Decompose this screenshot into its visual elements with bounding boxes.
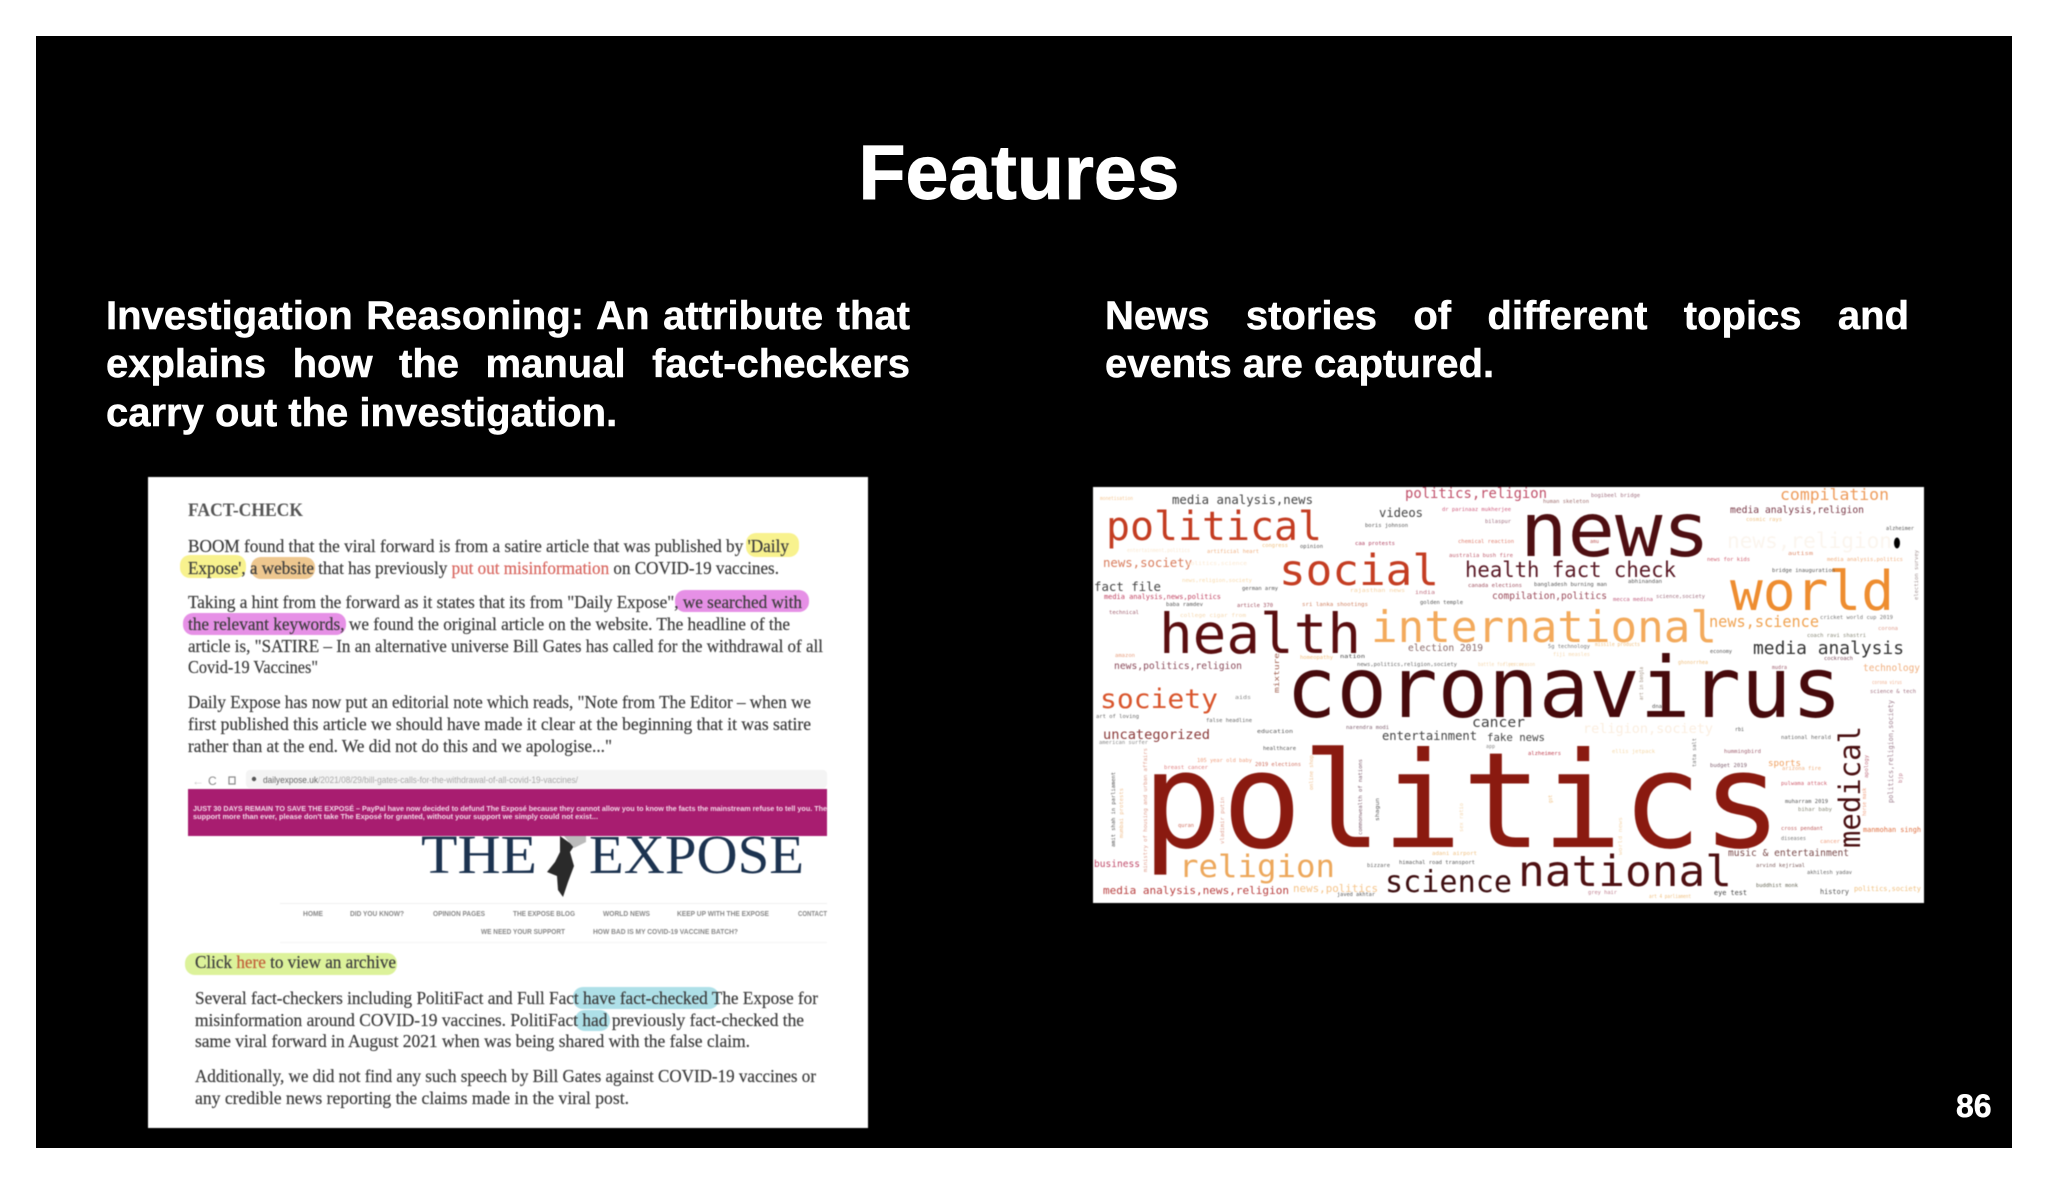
small words: tata salt [1692, 738, 1698, 767]
article paragraph 3: Daily Expose has now put an editorial note which reads, "Note from The Editor – when we [188, 692, 811, 712]
small words: dr parinaaz mukherjee [1442, 507, 1511, 513]
small words: bogibeel bridge [1591, 493, 1640, 499]
small words: bridge inauguration [1772, 568, 1835, 574]
medium words: business [1094, 859, 1140, 870]
medium words: news,politics [1293, 882, 1378, 895]
site navigation: WE NEED YOUR SUPPORT [481, 929, 566, 936]
article paragraph 4: misinformation around COVID-19 vaccines. PolitiFact had previously fact-checked the [195, 1010, 804, 1030]
medium words: entertainment [1382, 729, 1477, 743]
text block: news stories [1105, 294, 1909, 386]
small words: politics,religion,society [1887, 700, 1895, 803]
small words: hummingbird [1724, 749, 1761, 755]
site navigation: WORLD NEWS [603, 911, 650, 918]
article paragraph 5: any credible news reporting the claims made in the viral post. [195, 1088, 629, 1108]
small words: ministry of housing and urban affairs [1143, 748, 1149, 872]
logo: the expose: EXPOSE [589, 824, 804, 885]
article paragraph 4 [195, 988, 818, 1051]
logo: the expose [421, 824, 804, 897]
site navigation [280, 903, 828, 943]
small words: shagun [1375, 798, 1381, 821]
medium words: media analysis [1753, 638, 1904, 659]
small words: golden temple [1420, 600, 1463, 606]
article paragraph 5: Additionally, we did not find any such speech by Bill Gates against COVID-19 vaccines or [195, 1066, 816, 1086]
small words: cross pendant [1781, 826, 1823, 832]
small words: abhinandan [1628, 579, 1662, 585]
small words: artificial heart [1207, 549, 1259, 555]
small words: amu [1590, 539, 1599, 545]
small words: entertainment,politics [1127, 548, 1190, 554]
small words: akhilesh yadav [1807, 870, 1853, 876]
medium words: sports [1768, 759, 1801, 769]
small words: amazon [1115, 653, 1135, 659]
small words: media analysis,politics [1827, 557, 1903, 563]
small words: mumbai protests [1119, 788, 1125, 838]
medium words: compilation [1780, 485, 1889, 504]
small words: mixture [1273, 653, 1281, 693]
small words: article 370 [1237, 603, 1273, 609]
small words: apology [1864, 754, 1870, 778]
small words: quran [1178, 823, 1194, 829]
medium words: news,politics,religion [1114, 661, 1242, 672]
medium words: media analysis,religion [1730, 505, 1864, 516]
small words: news,politics,religion,society [1357, 662, 1458, 668]
small words: javed akhtar [1337, 892, 1376, 898]
large words: social [1279, 546, 1439, 596]
small words: amit shah in parliament [1111, 772, 1117, 847]
small words: art of loving [1096, 714, 1139, 720]
small words: mecca medina [1613, 597, 1653, 603]
medium words: compilation,politics [1492, 591, 1607, 602]
small words: news,religion,society [1182, 578, 1253, 584]
small words: buddhist monk [1756, 883, 1799, 889]
small words: art in bangla [1639, 667, 1645, 700]
medium words: fact file [1094, 580, 1161, 594]
article paragraph 1 [188, 536, 789, 578]
small words: false headline [1206, 718, 1252, 724]
small words: ghonorrhea [1678, 660, 1708, 666]
text block: investigation reasoning: carry out the investigation. [106, 391, 617, 435]
small words: science & tech [1870, 689, 1916, 695]
small words: american surfer [1099, 740, 1149, 746]
highlights [180, 533, 809, 1031]
small words: cosmic rays [1746, 517, 1782, 523]
small words: bjp [1898, 773, 1904, 783]
site navigation: HOME [303, 911, 323, 918]
small words: news for kids [1707, 557, 1750, 563]
small words: battle for rescue [1478, 662, 1524, 668]
medium words: politics,religion [1405, 486, 1547, 502]
large words: news [1520, 486, 1710, 574]
banner: save the expose: support more than ever, please don't take The Exposé for granted, without your support we simply could not exist... [193, 814, 598, 821]
small words: opinion [1300, 544, 1323, 550]
medium words: news,society [1103, 556, 1192, 570]
small words: sex ratio [1459, 803, 1465, 832]
medium words: eye test [1714, 889, 1747, 897]
medium words: videos [1379, 506, 1423, 520]
medium words: history [1820, 888, 1849, 896]
small words: 105 year old baby [1197, 758, 1253, 764]
small words: grey hair [1588, 890, 1618, 896]
large words: international [1371, 602, 1717, 653]
small words: technical [1109, 610, 1139, 616]
logo: the expose: THE [421, 824, 537, 885]
small words: india [1415, 590, 1435, 596]
small words: alzheimer [1886, 526, 1915, 532]
medium words: technology [1863, 663, 1920, 674]
small words: fiji measles [1553, 652, 1590, 658]
large words: medical [1833, 726, 1867, 848]
medium words: religion,society [1583, 722, 1713, 737]
site navigation: HOW BAD IS MY COVID-19 VACCINE BATCH? [593, 929, 738, 936]
browser url bar: ← [192, 774, 204, 788]
medium words: media analysis,news [1172, 493, 1313, 507]
small words: cancer [1820, 839, 1841, 845]
small words: narendra modi [1346, 725, 1389, 731]
title: Features [858, 130, 1179, 216]
small words: commonwealth of nations [1358, 759, 1364, 835]
medium words: politics,society [1854, 885, 1921, 893]
small words: australia bush fire [1449, 553, 1513, 559]
small words: monetisation [1100, 496, 1133, 502]
article paragraph 2: the relevant keywords, we found the original article on the website. The headline of the [188, 614, 790, 634]
medium words: cancer [1472, 715, 1525, 731]
site navigation: DID YOU KNOW? [350, 911, 404, 918]
page number: 86 [1956, 1088, 1992, 1124]
small words: art 4 parliament [1649, 894, 1691, 900]
small words: baba ramdev [1166, 602, 1204, 608]
small words: dna [1652, 704, 1662, 710]
small words: adani airport [1432, 851, 1477, 857]
small words: rajasthan news [1350, 588, 1405, 594]
small words: human skeleton [1543, 499, 1589, 505]
site navigation: OPINION PAGES [433, 911, 485, 918]
large words: political [1106, 504, 1322, 550]
text block: investigation reasoning [106, 294, 910, 435]
article paragraph 3: rather than at the end. We did not do this and we apologise..." [188, 736, 612, 756]
browser url bar: dailyexpose.uk/2021/08/29/bill-gates-calls-for-the-withdrawal-of-all-covid-19-vaccines/ [263, 775, 578, 785]
small words: corona [1878, 626, 1898, 632]
medium words: news,religion [1727, 529, 1892, 553]
small words: college cigar from [1180, 613, 1247, 619]
small words: ellis jetpack [1612, 749, 1656, 755]
small words: corona virus [1872, 680, 1902, 686]
article paragraph 5 [195, 1066, 816, 1108]
small words: arvind kejriwal [1756, 863, 1805, 869]
site navigation: CONTACT [798, 911, 828, 918]
small words: bilaspur [1485, 519, 1512, 525]
article paragraph 3 [188, 692, 811, 756]
small words: bizzare [1367, 863, 1390, 869]
article paragraph 2 [188, 592, 823, 677]
panel: fact-check article screenshot [148, 477, 868, 1128]
small words: himachal road transport [1399, 860, 1475, 866]
medium words: election 2019 [1408, 643, 1483, 654]
small words: missile products [1595, 642, 1640, 648]
site navigation: THE EXPOSE BLOG [513, 911, 576, 918]
small words: flyer reason [1503, 662, 1535, 668]
panel: topic word cloud [1093, 485, 1924, 903]
medium words: music & entertainment [1728, 848, 1849, 859]
small words: congress [1262, 543, 1288, 549]
small words: politics,science [1187, 561, 1247, 567]
large words: science [1385, 865, 1512, 900]
small words: german army [1242, 586, 1279, 592]
medium words: fake news [1487, 731, 1545, 744]
small words: nation [1340, 654, 1365, 660]
small words: muharram 2019 [1785, 799, 1828, 805]
small words: gst [1548, 795, 1554, 803]
archive link: Click here to view an archive [195, 952, 396, 972]
small words: economy [1710, 649, 1733, 655]
small words: breast cancer [1164, 765, 1209, 771]
small words: sri lanka shootings [1302, 602, 1368, 608]
small words: online shop [1309, 755, 1315, 790]
small words: 2019 elections [1255, 762, 1301, 768]
large words: world [1730, 560, 1894, 623]
article paragraph 3: first published this article we should have made it clear at the beginning that it was satire [188, 714, 811, 734]
black dot [1894, 538, 1900, 548]
small words: canada elections [1468, 583, 1522, 589]
small words: budget 2019 [1710, 763, 1747, 769]
medium words: manmohan singh [1863, 826, 1921, 834]
article paragraph 1: BOOM found that the viral forward is from a satire article that was published by 'Daily [188, 536, 789, 556]
small words: world news [1618, 817, 1624, 855]
small words: pulwama attack [1781, 781, 1828, 787]
small words: horse mask [1862, 787, 1868, 816]
article paragraph 1: Expose', a website that has previously put out misinformation on COVID-19 vaccines. [188, 558, 779, 578]
banner: save the expose [188, 789, 827, 836]
medium words: news,science [1709, 612, 1819, 631]
small words: cockroach [1824, 656, 1853, 662]
large words: coronavirus [1286, 639, 1842, 737]
small words: app [1486, 744, 1495, 750]
small words: aids [1235, 695, 1251, 701]
article paragraph 2: Covid-19 Vaccines" [188, 657, 318, 677]
small words: rbi [1735, 727, 1744, 733]
article paragraph 2: article is, "SATIRE – In an alternative universe Bill Gates has called for the withdrawal of all [188, 636, 823, 656]
large words: national [1518, 847, 1732, 897]
large words: society [1100, 684, 1218, 715]
text block: investigation reasoning: Investigation Reasoning: An attribute that [106, 294, 910, 338]
large words [1100, 486, 1894, 900]
small words: cricket world cup 2019 [1820, 615, 1893, 621]
large words: politics [1142, 725, 1782, 879]
small words: science,society [1656, 594, 1706, 600]
heading: fact-check: FACT-CHECK [188, 500, 303, 521]
article paragraph 2: Taking a hint from the forward as it states that its from "Daily Expose", we searched with [188, 592, 802, 612]
text block: news stories: events are captured. [1105, 342, 1494, 386]
browser url bar: C [208, 774, 217, 788]
small words: alzheimers [1528, 751, 1561, 757]
small words: election survey [1914, 549, 1920, 600]
article paragraph 4: same viral forward in August 2021 when was being shared with the false claim. [195, 1031, 750, 1051]
small words: chemical reaction [1458, 539, 1514, 545]
medium words: media analysis,news,politics [1104, 593, 1221, 601]
large words: religion [1179, 849, 1335, 885]
small words: 5g technology [1548, 644, 1591, 650]
text block: news stories: News stories of different topics and [1105, 294, 1909, 338]
large words: health fact check [1465, 558, 1676, 582]
large words: health [1159, 602, 1361, 666]
small words: bihar baby [1798, 807, 1833, 813]
site navigation: KEEP UP WITH THE EXPOSE [677, 911, 769, 918]
small words: boris johnson [1365, 523, 1408, 529]
small words: vladimir putin [1220, 797, 1226, 844]
small words [1096, 493, 1920, 900]
small words: mudra [1772, 665, 1787, 671]
small words: diseases [1781, 836, 1806, 842]
small words: national herald [1781, 735, 1831, 741]
small words: arizona fire [1782, 766, 1821, 772]
small words: homeopathy [1300, 655, 1334, 661]
browser url bar [192, 770, 827, 788]
small words: coach ravi shastri [1807, 633, 1866, 639]
small words: caa protests [1355, 541, 1395, 547]
small words: autism [1788, 551, 1814, 557]
small words: bangladesh burning man [1534, 582, 1607, 588]
medium words: uncategorized [1103, 728, 1210, 743]
small words: healthcare [1263, 746, 1296, 752]
banner: save the expose: JUST 30 DAYS REMAIN TO SAVE THE EXPOSÉ – PayPal have now decided to defund The Exposé because they cannot allow you to know the facts the mainstream refuse to tell you. The [193, 804, 827, 813]
medium words [1094, 485, 1921, 897]
article paragraph 4: Several fact-checkers including PolitiFact and Full Fact have fact-checked The Expose for [195, 988, 818, 1008]
text block: investigation reasoning: explains how the manual fact-checkers [106, 342, 910, 386]
small words: education [1257, 729, 1293, 735]
medium words: media analysis,news,religion [1103, 884, 1289, 897]
